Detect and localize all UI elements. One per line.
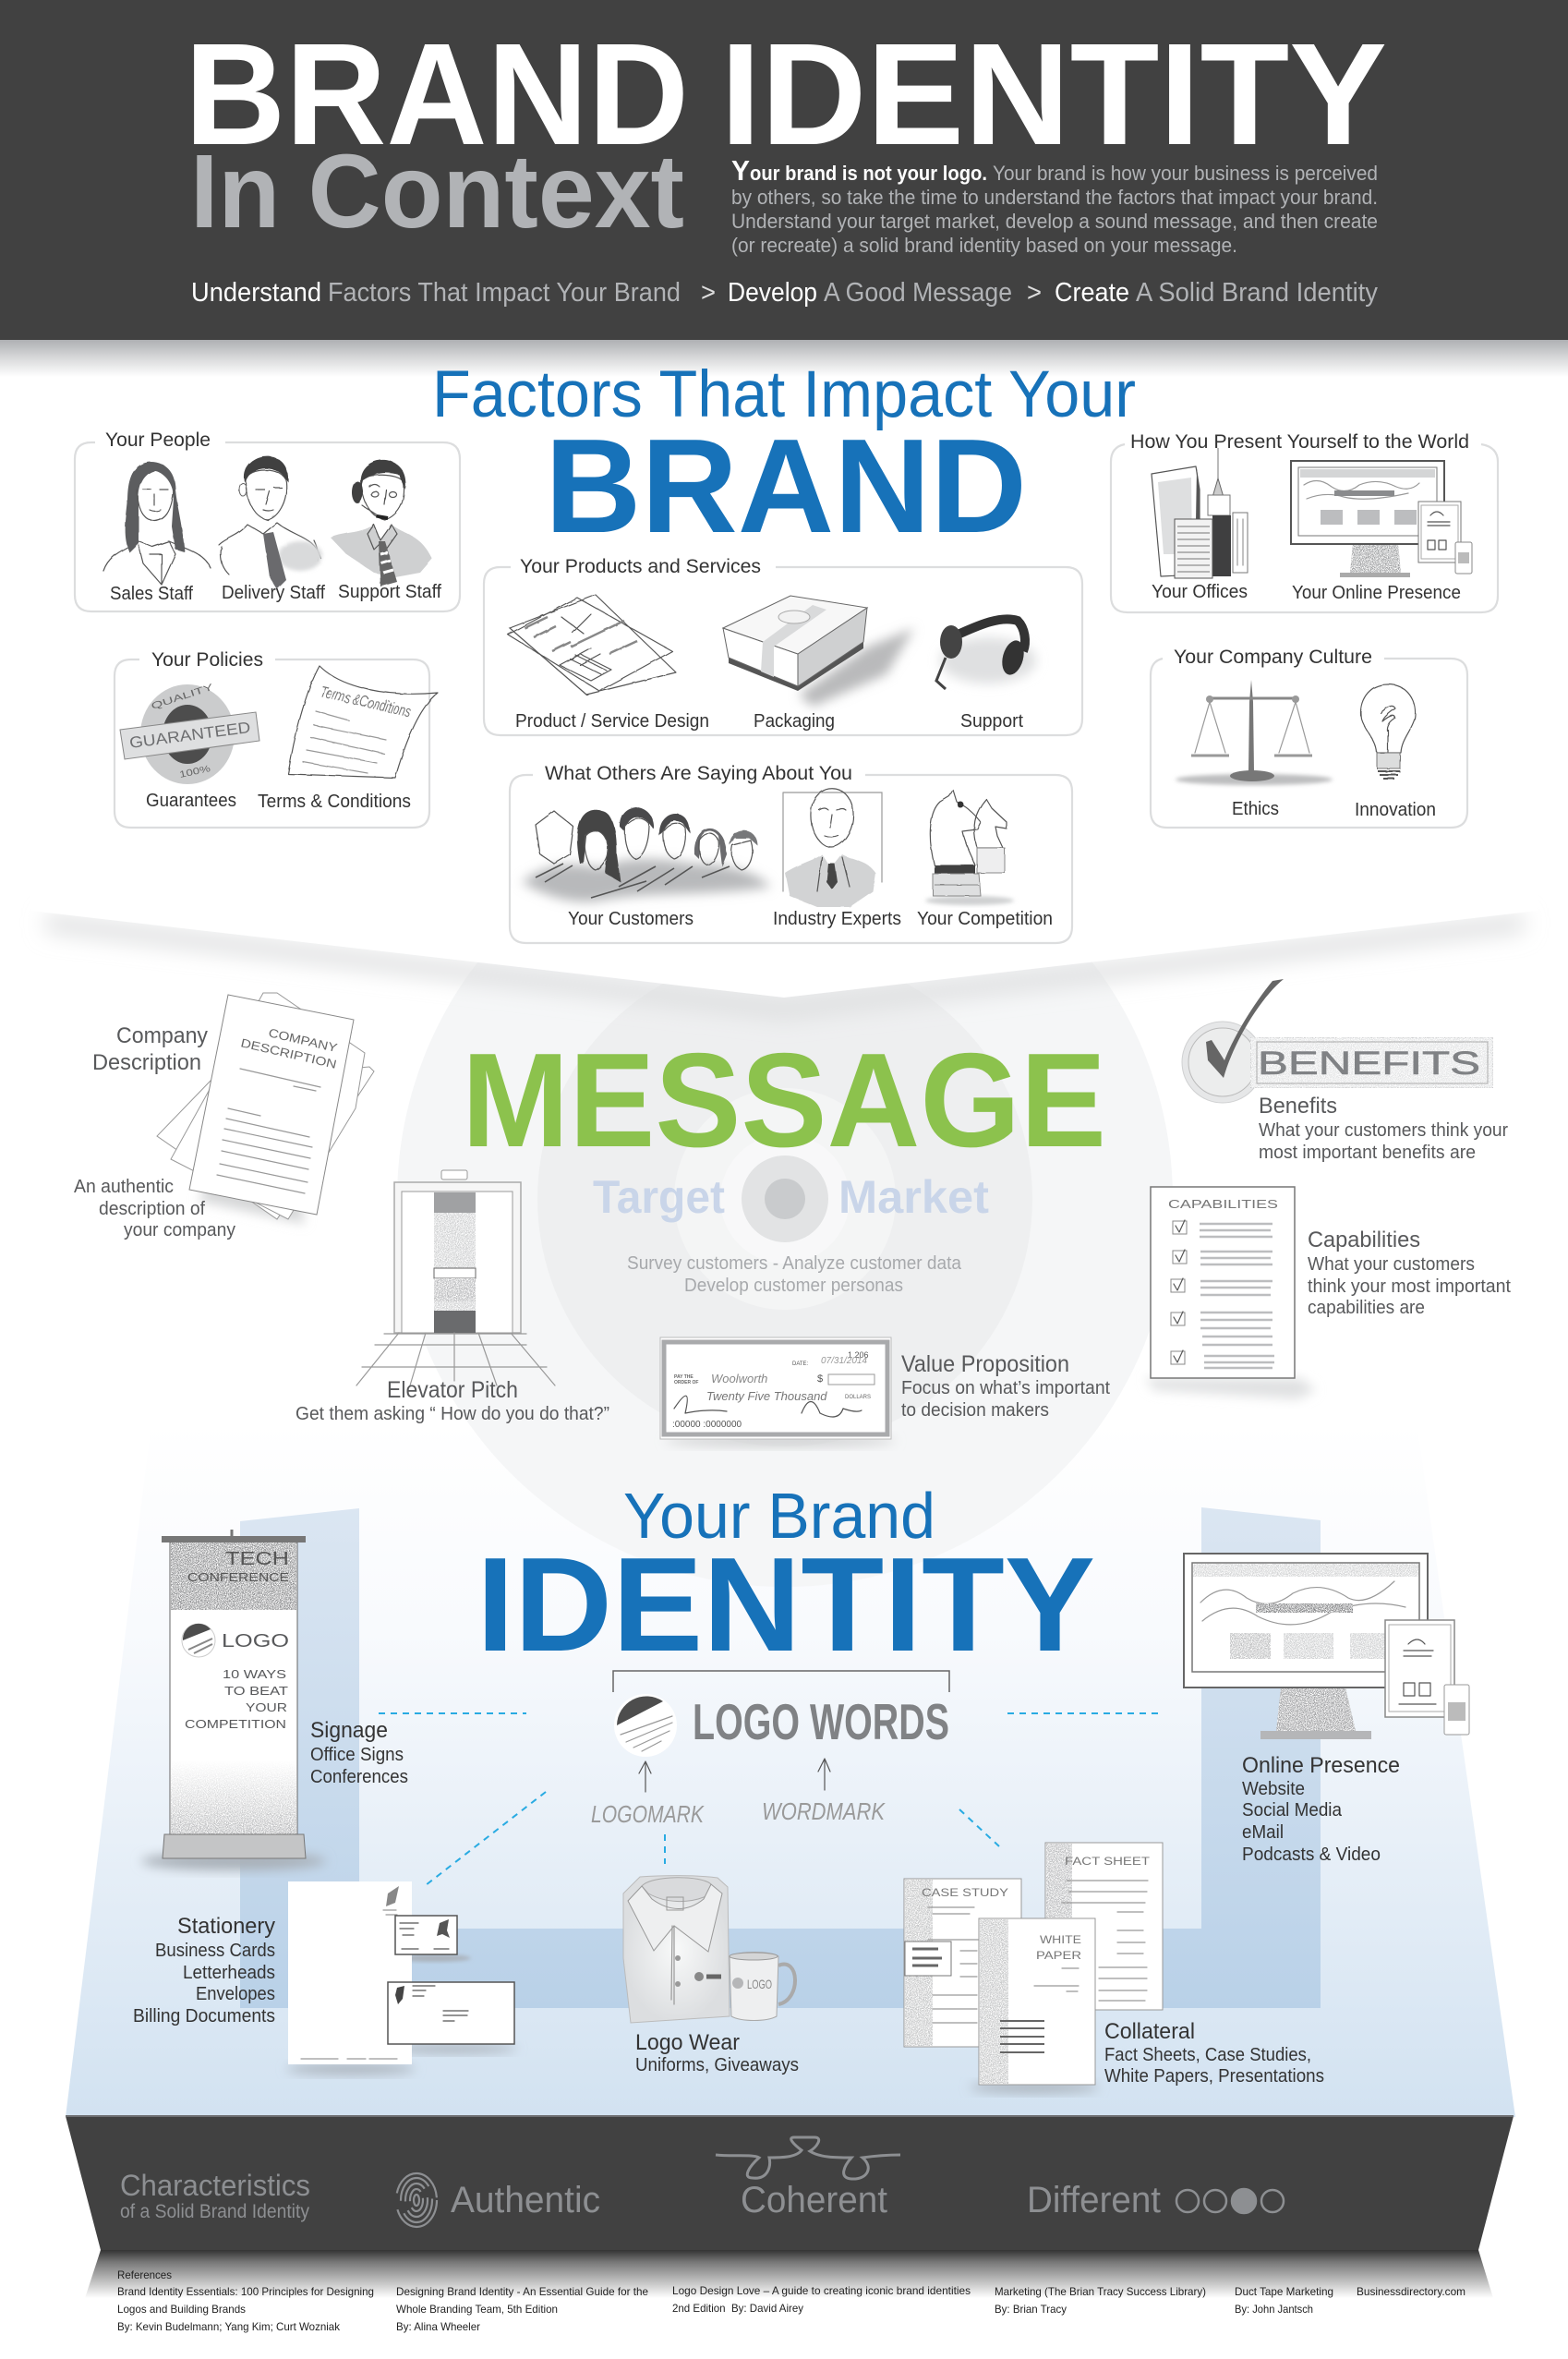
stationery	[133, 1881, 517, 2075]
list: White Papers, Presentations	[1104, 2066, 1324, 2087]
title: BRAND	[185, 14, 689, 175]
icon: fact sheet, case study, white paper	[904, 1843, 1163, 2093]
label: different: Different	[1027, 2180, 1161, 2220]
icon: fact sheet, case study, white paper: WHITE	[1040, 1933, 1081, 1946]
icon: conference banner: TO BEAT	[224, 1684, 288, 1698]
description	[1259, 1120, 1508, 1163]
icon: guarantee seal: 100%	[178, 764, 211, 780]
logo diagram	[591, 1671, 949, 1828]
label: online presence: Your Online Presence	[1292, 583, 1461, 603]
icon: cheque: 07/31/2014	[821, 1356, 867, 1366]
icon: conference banner: TECH	[225, 1549, 289, 1569]
icon: cheque: PAY THE	[674, 1374, 694, 1380]
process steps line: Develop	[728, 278, 817, 308]
collateral	[904, 1843, 1324, 2093]
references: Whole Branding Team, 5th Edition	[396, 2303, 558, 2316]
icon: terms page	[288, 666, 438, 778]
panel: company culture	[1151, 647, 1467, 828]
icon: guarantee seal	[120, 683, 259, 784]
icon: delivery staff	[219, 456, 322, 589]
icon: cheque: DOLLARS	[845, 1395, 871, 1400]
references: Brand Identity Essentials: 100 Principles for Designing	[117, 2285, 374, 2298]
heading: Your People	[105, 429, 211, 451]
header band	[0, 0, 1568, 340]
icon: packaging box	[723, 596, 914, 707]
list: Envelopes	[196, 1984, 275, 2004]
list: Website	[1242, 1779, 1305, 1799]
process steps line: >	[701, 278, 716, 308]
wordmark: LOGO WORDS	[693, 1693, 949, 1750]
list: Letterheads	[183, 1963, 275, 1983]
references: By: Brian Tracy	[995, 2303, 1067, 2316]
icon: capabilities checklist: CAPABILITIES	[1168, 1197, 1278, 1211]
icon: sales staff	[103, 462, 211, 585]
process steps line: A Solid Brand Identity	[1136, 278, 1378, 308]
company description	[74, 993, 374, 1240]
icon: polo shirt and mug: LOGO	[747, 1977, 772, 1991]
icon: conference banner: COMPETITION	[185, 1717, 286, 1731]
references: Businessdirectory.com	[1357, 2285, 1465, 2298]
references: Duct Tape Marketing	[1235, 2285, 1333, 2298]
heading: Elevator Pitch	[387, 1377, 518, 1403]
blue U-shaped band	[240, 1507, 1321, 2008]
target market text	[627, 1253, 962, 1296]
icon: cheque: Woolworth	[711, 1372, 767, 1385]
process steps line: Factors That Impact Your Brand	[328, 278, 681, 308]
icon: customers crowd	[522, 807, 771, 901]
icon: benefits badge	[1182, 979, 1493, 1103]
description: think your most important	[1308, 1276, 1511, 1297]
factors heading	[432, 358, 1136, 561]
title	[185, 14, 1387, 175]
target market label: Market	[838, 1171, 989, 1223]
logomark label: LOGOMARK	[591, 1800, 705, 1828]
label: innovation: Innovation	[1355, 800, 1436, 820]
intro paragraph: Your brand is how your business is perceived	[993, 162, 1378, 185]
list	[310, 1745, 408, 1787]
icon: terms page: Terms &Conditions	[319, 683, 413, 720]
logo wear	[623, 1876, 799, 2075]
references: By: Kevin Budelmann; Yang Kim; Curt Wozniak	[117, 2320, 341, 2333]
references: References	[117, 2268, 172, 2281]
icon: four circles	[1176, 2189, 1284, 2213]
icon: online presence devices	[1291, 461, 1472, 577]
logomark	[614, 1694, 677, 1757]
icon: fact sheet, case study, white paper: FACT SHEET	[1065, 1855, 1151, 1868]
icon: capabilities checklist	[1145, 1187, 1316, 1399]
value proposition	[660, 1337, 1110, 1446]
message heading: MESSAGE	[462, 1025, 1106, 1175]
panel: your policies	[115, 649, 438, 828]
heading	[92, 1023, 208, 1075]
label: support: Support	[960, 711, 1023, 732]
intro paragraph: Understand your target market, develop a sound message, and then create	[731, 210, 1378, 233]
list: Business Cards	[155, 1941, 275, 1961]
icon: stationery set	[286, 1881, 517, 2075]
icon: cheque: $	[817, 1373, 823, 1385]
list: Office Signs	[310, 1745, 404, 1765]
identity heading: IDENTITY	[476, 1530, 1095, 1679]
identity backdrop: blue gradient trapezoid	[66, 1422, 1515, 2117]
icon: cheque: 1 206	[848, 1350, 869, 1360]
signage	[141, 1530, 408, 1870]
icon: conference banner: CONFERENCE	[187, 1570, 289, 1584]
heading: Collateral	[1104, 2019, 1195, 2044]
icon: fingerprint	[396, 2173, 437, 2227]
heading: How You Present Yourself to the World	[1130, 431, 1469, 453]
label: customers: Your Customers	[568, 909, 694, 929]
wordmark label: WORDMARK	[762, 1797, 886, 1825]
panel: how you present yourself	[1111, 431, 1498, 612]
references: By: Alina Wheeler	[396, 2320, 480, 2333]
panel: products and services	[484, 556, 1082, 735]
icon: cheque: Twenty Five Thousand	[706, 1389, 827, 1403]
icon: conference banner: 10 WAYS	[223, 1667, 286, 1681]
description: Focus on what’s important	[901, 1378, 1110, 1398]
target market label: Target	[593, 1171, 725, 1223]
icon: conference banner	[141, 1530, 326, 1870]
list	[133, 1941, 275, 2026]
icon: fact sheet, case study, white paper: CASE STUDY	[922, 1886, 1008, 1899]
arrow: to logomark	[639, 1761, 651, 1792]
label: authentic: Authentic	[451, 2180, 600, 2220]
list: Social Media	[1242, 1800, 1343, 1821]
description	[901, 1378, 1110, 1421]
label: support staff: Support Staff	[338, 582, 441, 602]
heading: Your Company Culture	[1174, 647, 1372, 668]
references: By: John Jantsch	[1235, 2303, 1313, 2316]
process steps line: >	[1027, 278, 1042, 308]
factors heading: Factors That Impact Your	[432, 358, 1136, 431]
heading	[120, 2169, 310, 2222]
factors heading: BRAND	[545, 411, 1027, 561]
label: sales staff: Sales Staff	[110, 584, 193, 604]
icon: monitor, tablet, phone	[1184, 1554, 1469, 1739]
target market text: Survey customers - Analyze customer data	[627, 1253, 962, 1274]
subtitle: In Context	[190, 133, 684, 249]
list: Billing Documents	[133, 2006, 275, 2026]
heading: Logo Wear	[635, 2030, 740, 2055]
references: Logos and Building Brands	[117, 2303, 246, 2316]
icon: support staff	[331, 460, 432, 587]
icon: guarantee seal: QUALITY	[151, 683, 215, 712]
intro paragraph: our brand is not your logo.	[750, 162, 987, 185]
label: terms and conditions: Terms & Conditions	[258, 792, 411, 812]
icon: benefits badge: BENEFITS	[1258, 1046, 1480, 1082]
references: Logo Design Love – A guide to creating iconic brand identities	[672, 2284, 971, 2297]
heading: Value Proposition	[901, 1351, 1069, 1377]
icon: fact sheet, case study, white paper: PAPER	[1036, 1949, 1081, 1962]
list: Podcasts & Video	[1242, 1845, 1381, 1865]
icon: office buildings	[1152, 448, 1248, 578]
icon: product documents	[508, 595, 676, 695]
description: An authentic	[74, 1177, 174, 1197]
list: Conferences	[310, 1767, 408, 1787]
description: to decision makers	[901, 1400, 1049, 1421]
online presence	[1184, 1554, 1469, 1865]
process steps line	[191, 278, 1378, 308]
references: 2nd Edition By: David Airey	[672, 2302, 803, 2315]
title: IDENTITY	[720, 14, 1387, 175]
icon: elevator	[356, 1170, 555, 1385]
heading: Your Products and Services	[520, 556, 761, 577]
label: delivery staff: Delivery Staff	[222, 583, 325, 603]
list	[1242, 1779, 1381, 1865]
elevator pitch	[296, 1170, 609, 1424]
references: Marketing (The Brian Tracy Success Library)	[995, 2285, 1206, 2298]
panel: what others are saying	[510, 763, 1072, 943]
connector dashed lines	[379, 1713, 1164, 1885]
arrow: to wordmark	[818, 1759, 830, 1790]
process steps line: A Good Message	[824, 278, 1012, 308]
heading: Company	[116, 1023, 208, 1048]
list: Uniforms, Giveaways	[635, 2055, 799, 2075]
description: What your customers think your	[1259, 1120, 1508, 1141]
description: Get them asking “ How do you do that?”	[296, 1404, 609, 1424]
footer shadow	[85, 2250, 1493, 2298]
label: guarantees: Guarantees	[146, 791, 236, 811]
icon: polo shirt and mug	[623, 1876, 795, 2023]
heading: What Others Are Saying About You	[545, 763, 852, 784]
heading: Characteristics	[120, 2169, 310, 2202]
description: description of	[99, 1199, 205, 1219]
process steps line: Create	[1055, 278, 1129, 308]
icon: cheque: DATE:	[792, 1361, 809, 1367]
heading: Stationery	[177, 1914, 275, 1939]
icon: headset	[936, 619, 1036, 689]
target market text: Develop customer personas	[684, 1276, 903, 1296]
heading: Benefits	[1259, 1094, 1337, 1119]
icon: scales	[1176, 680, 1333, 785]
heading: Online Presence	[1242, 1753, 1400, 1778]
benefits	[1182, 979, 1508, 1163]
label: coherent: Coherent	[741, 2180, 887, 2220]
target market label	[593, 1171, 989, 1223]
factors panel shadow	[46, 914, 1524, 1018]
icon: industry expert	[783, 789, 882, 907]
label: experts: Industry Experts	[773, 909, 901, 929]
icon: stacked documents: COMPANY	[267, 1025, 339, 1055]
label: packaging: Packaging	[754, 711, 835, 732]
header shadow	[0, 340, 1568, 377]
intro paragraph: (or recreate) a solid brand identity based on your message.	[731, 234, 1237, 257]
label: competition: Your Competition	[917, 909, 1053, 929]
description: capabilities are	[1308, 1298, 1425, 1318]
references: Designing Brand Identity - An Essential Guide for the	[396, 2285, 648, 2298]
intro paragraph: Y	[731, 154, 750, 187]
panel: your people	[75, 429, 460, 611]
description: your company	[124, 1220, 235, 1240]
description: What your customers	[1308, 1254, 1475, 1275]
icon: conference banner: YOUR	[246, 1700, 287, 1714]
icon: light bulb	[1360, 684, 1416, 779]
intro paragraph	[731, 154, 1378, 257]
list: eMail	[1242, 1822, 1284, 1843]
list: Fact Sheets, Case Studies,	[1104, 2045, 1311, 2065]
list	[1104, 2045, 1324, 2087]
factors white panel	[0, 340, 1568, 998]
capabilities	[1145, 1187, 1511, 1399]
icon: guarantee seal: GUARANTEED	[128, 719, 251, 752]
icon: stacked documents: DESCRIPTION	[239, 1035, 338, 1071]
description: most important benefits are	[1259, 1143, 1476, 1163]
description	[1308, 1254, 1511, 1318]
label: ethics: Ethics	[1232, 799, 1279, 819]
heading: Signage	[310, 1718, 388, 1743]
heading: Your Policies	[151, 649, 263, 671]
icon: stacked documents	[157, 993, 374, 1224]
intro paragraph: by others, so take the time to understand the factors that impact your brand.	[731, 186, 1378, 209]
icon: cheque: :00000 :0000000	[672, 1420, 742, 1430]
identity heading: Your Brand	[623, 1480, 935, 1552]
label: product design: Product / Service Design	[515, 711, 709, 732]
heading: Capabilities	[1308, 1228, 1420, 1252]
process steps line: Understand	[191, 278, 321, 308]
heading: Description	[92, 1050, 201, 1075]
characteristics band	[66, 2115, 1514, 2250]
icon: conference banner: LOGO	[222, 1631, 289, 1651]
label: offices: Your Offices	[1152, 582, 1248, 602]
description	[74, 1177, 235, 1240]
target market concentric circles	[397, 811, 1173, 1587]
heading: of a Solid Brand Identity	[120, 2201, 309, 2222]
icon: cheque	[660, 1337, 896, 1446]
icon: knot	[716, 2137, 900, 2179]
icon: cheque: ORDER OF	[674, 1380, 698, 1385]
references	[117, 2268, 1465, 2333]
icon: chess knights	[925, 790, 1014, 905]
